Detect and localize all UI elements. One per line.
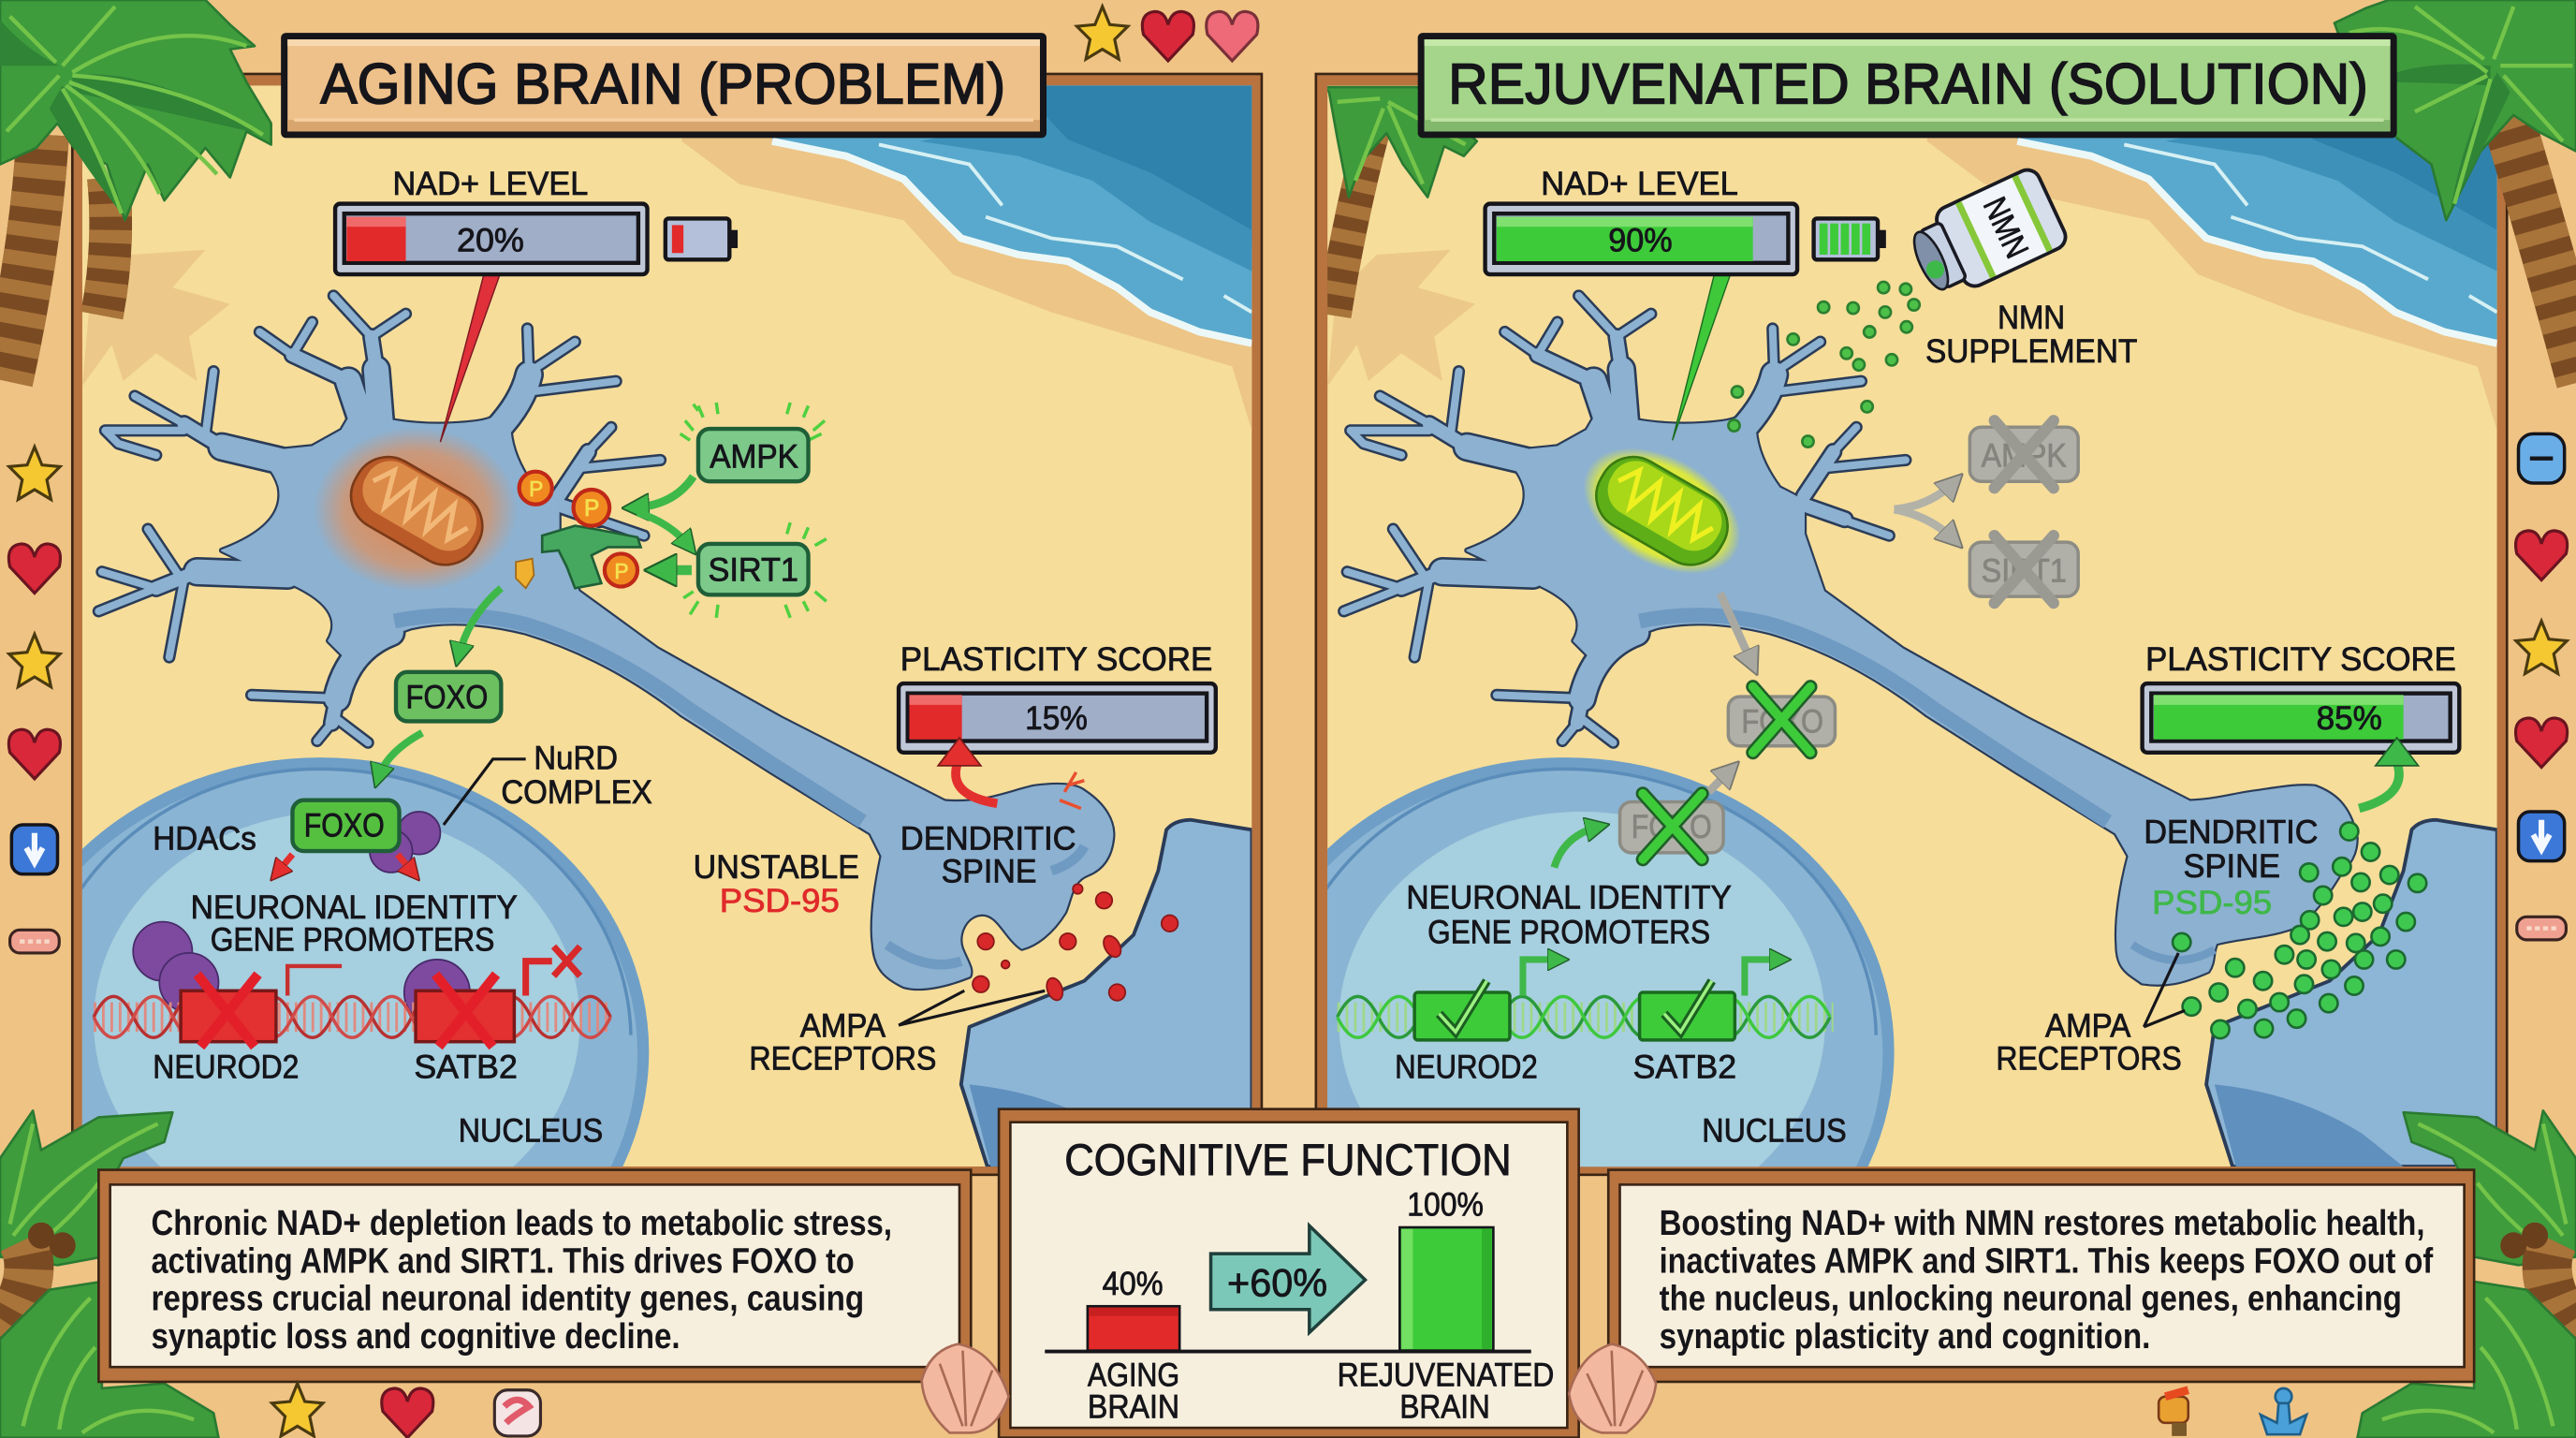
NMN supplement label — [1925, 300, 2137, 370]
arrow spine to plasticity — [938, 738, 997, 803]
AMPA receptors many — [2173, 822, 2426, 1038]
grey FOXO blocked nucleus: FOXO — [1632, 809, 1712, 845]
dendritic spine label right: SPINE — [2183, 848, 2280, 885]
HDAC purple blobs — [133, 922, 470, 1025]
text panel: solution summary: Boosting NAD+ with NMN restores metabolic health, — [1660, 1203, 2424, 1242]
arrow spine to plasticity right — [2359, 738, 2418, 808]
dendritic spine label: DENDRITIC — [900, 820, 1076, 857]
unstable PSD-95 label — [694, 849, 859, 919]
gene promoters label — [191, 889, 518, 958]
phosphate 1: P — [529, 477, 543, 501]
improvement arrow: +60% — [1227, 1261, 1327, 1305]
plasticity bar 85%: 85% — [2317, 700, 2382, 737]
dendritic spine label right: DENDRITIC — [2144, 814, 2318, 850]
arrow FOXO to nucleus — [378, 733, 422, 779]
SATB2 label: SATB2 — [414, 1049, 518, 1085]
shell left — [922, 1344, 1009, 1432]
icon: right heart 1 — [2516, 531, 2568, 580]
NAD+ bar 20%: 20% — [457, 223, 524, 259]
AMPA label right: RECEPTORS — [1996, 1041, 2182, 1078]
FOXO nucleus — [292, 800, 400, 851]
icon: left heart 2 — [8, 729, 60, 779]
AMPA label: AMPA — [800, 1007, 886, 1044]
grey FOXO blocked cytoplasm: FOXO — [1741, 704, 1823, 741]
plasticity bar 15% — [899, 683, 1216, 753]
AMPA leader lines right — [2144, 953, 2185, 1027]
HDACs label: HDACs — [153, 820, 256, 857]
icon: bottom pixel figure — [2159, 1390, 2188, 1436]
beach scene left — [0, 85, 1251, 1345]
arrow AMPK to phosphate — [633, 477, 694, 507]
aging axis label — [1088, 1357, 1179, 1426]
palm top right — [2334, 0, 2576, 381]
icon: right blue capsule — [2519, 433, 2565, 483]
title bar: rejuvenated brain: REJUVENATED BRAIN (SOLUTION) — [1448, 52, 2368, 117]
icon: right blue gem — [2519, 812, 2565, 861]
text panel: problem summary — [98, 1170, 971, 1382]
aging axis label: BRAIN — [1088, 1389, 1179, 1426]
text panel: solution summary: synaptic plasticity and cognition. — [1660, 1316, 2150, 1356]
panel: aging brain — [71, 73, 1264, 1176]
NAD+ pointer — [440, 271, 501, 442]
icon: right star — [2516, 621, 2567, 674]
battery full — [1814, 218, 1886, 259]
icon: bottom anchor — [2261, 1388, 2306, 1434]
plasticity bar 15%: 15% — [1025, 700, 1088, 737]
blocked promoter arrow 2 — [526, 946, 580, 996]
icon: left pill — [10, 930, 59, 953]
dendritic spine label — [900, 820, 1076, 889]
bar rejuvenated 100%: 100% — [1407, 1187, 1484, 1224]
icon: left blue gem — [11, 825, 57, 874]
NMN powder dots — [1728, 282, 1920, 448]
text panel: solution summary: the nucleus, unlocking neuronal genes, enhancing — [1660, 1279, 2402, 1318]
gene promoters label: GENE PROMOTERS — [211, 921, 494, 958]
promoter arrow 2 — [1745, 960, 1782, 996]
bar aging 40%: 40% — [1103, 1266, 1164, 1302]
AMPA label — [749, 1007, 936, 1078]
icon: bottom pink item — [494, 1390, 540, 1436]
NAD+ pointer right — [1673, 271, 1732, 440]
bar rejuvenated 100% — [1399, 1187, 1493, 1351]
palm bottom right — [2358, 1110, 2576, 1438]
mitochondrion green — [1561, 422, 1763, 600]
icon: left heart 1 — [8, 544, 60, 594]
mitochondrion orange — [314, 427, 518, 592]
icon: bottom heart — [382, 1388, 433, 1438]
gene box NEUROD2 active — [1414, 981, 1510, 1040]
AMPA leader lines — [899, 990, 1045, 1025]
unstable PSD-95 label: UNSTABLE — [694, 849, 859, 886]
AMPA label right: AMPA — [2045, 1007, 2131, 1044]
plasticity label right: PLASTICITY SCORE — [2145, 641, 2456, 678]
NUCLEUS label right: NUCLEUS — [1702, 1113, 1847, 1150]
neuron left — [98, 296, 1112, 988]
plasticity label: PLASTICITY SCORE — [900, 641, 1212, 678]
NAD+ bar 90% — [1486, 204, 1797, 274]
title bar: aging brain — [281, 33, 1046, 138]
palm top left — [0, 0, 271, 381]
panel frame left — [72, 74, 1262, 1175]
phosphate small yellow — [516, 559, 534, 588]
gene promoters label right: GENE PROMOTERS — [1427, 914, 1710, 950]
NuRD leader line — [444, 759, 526, 825]
gene promoters label right: NEURONAL IDENTITY — [1406, 880, 1732, 917]
phosphate 2 — [574, 490, 609, 526]
axis — [1045, 1350, 1531, 1353]
AMPA receptors scattered — [973, 884, 1178, 1003]
panel: cognitive function chart — [999, 1109, 1579, 1438]
icon: right heart 2 — [2516, 718, 2568, 768]
aging axis label: AGING — [1088, 1357, 1179, 1393]
NUCLEUS label: NUCLEUS — [459, 1113, 603, 1150]
text panel: problem summary: repress crucial neuronal identity genes, causing — [152, 1279, 864, 1318]
NEUROD2 label right: NEUROD2 — [1395, 1049, 1538, 1085]
NMN supplement label: SUPPLEMENT — [1925, 333, 2137, 370]
NEUROD2 label: NEUROD2 — [153, 1049, 299, 1085]
dendritic spine label right — [2144, 814, 2318, 885]
NuRD label: COMPLEX — [501, 774, 652, 811]
icon: bottom star — [272, 1384, 323, 1436]
FOXO cytoplasm — [396, 672, 501, 721]
rejuvenated axis label: BRAIN — [1399, 1389, 1490, 1426]
grey SIRT1 inactive — [1969, 536, 2078, 603]
NAD+ label right: NAD+ LEVEL — [1541, 166, 1738, 202]
improvement arrow — [1211, 1225, 1365, 1332]
phosphate 3: P — [614, 559, 629, 583]
receptor target protein — [542, 526, 641, 588]
NAD+ bar 20% — [335, 204, 648, 274]
AMPK active: AMPK — [710, 438, 799, 475]
SIRT1 active — [683, 522, 827, 618]
gene box SATB2 active — [1640, 981, 1734, 1040]
text panel: problem summary: synaptic loss and cognitive decline. — [152, 1316, 681, 1356]
battery low — [666, 218, 738, 259]
palm small inside right panel — [1325, 87, 1477, 315]
NAD+ bar 90%: 90% — [1608, 223, 1673, 259]
icon: right pill — [2517, 917, 2566, 940]
arrow to SIRT1 — [637, 513, 690, 547]
DNA strand green — [1338, 996, 1834, 1037]
blocked promoter arrow 1 — [287, 966, 342, 996]
SIRT1 active: SIRT1 — [708, 551, 798, 588]
rejuvenated axis label: REJUVENATED — [1338, 1357, 1554, 1393]
shell right — [1569, 1344, 1656, 1432]
grey FOXO blocked nucleus — [1620, 794, 1723, 859]
panel frame right — [1316, 74, 2507, 1175]
neuron right — [1344, 296, 2356, 984]
FOXO cytoplasm: FOXO — [406, 679, 488, 715]
gene box SATB2 repressed — [416, 975, 514, 1047]
title bar: rejuvenated brain — [1418, 33, 2397, 138]
plasticity bar 85% — [2143, 683, 2459, 753]
grey AMPK inactive: AMPK — [1982, 437, 2067, 474]
NAD+ label: NAD+ LEVEL — [393, 166, 588, 202]
AMPA label: RECEPTORS — [749, 1041, 936, 1078]
grey FOXO blocked cytoplasm — [1728, 687, 1835, 753]
grey AMPK inactive — [1969, 420, 2078, 488]
FOXO nucleus: FOXO — [304, 807, 385, 844]
promoter arrow 1 — [1523, 960, 1560, 996]
DNA strand red — [94, 996, 611, 1037]
bar aging 40% — [1088, 1266, 1179, 1351]
grey arrow out of nucleus — [1708, 769, 1732, 792]
icon: top star — [1076, 7, 1128, 59]
palm bottom left — [0, 1110, 218, 1438]
NuRD label: NuRD — [534, 740, 618, 776]
grey branching arrows — [1895, 481, 1955, 540]
dendritic spine label: SPINE — [942, 853, 1036, 889]
title bar: aging brain: AGING BRAIN (PROBLEM) — [320, 52, 1005, 117]
phosphate 2: P — [584, 496, 599, 521]
SATB2 label right: SATB2 — [1633, 1049, 1736, 1085]
icon: top pink heart — [1207, 11, 1258, 61]
text panel: problem summary: Chronic NAD+ depletion leads to metabolic stress, — [152, 1203, 892, 1242]
grey SIRT1 inactive: SIRT1 — [1982, 552, 2067, 589]
beach scene right — [1237, 85, 2497, 1345]
AMPA label right — [1996, 1007, 2182, 1078]
gene box NEUROD2 repressed — [181, 975, 276, 1047]
text panel: problem summary: activating AMPK and SIRT1. This drives FOXO to — [152, 1240, 855, 1280]
red arrows repress — [276, 855, 414, 874]
NMN bottle — [1903, 166, 2070, 304]
green exit arrow — [1554, 827, 1600, 868]
icon: left star 2 — [9, 634, 60, 687]
NMN bottle: NMN — [1976, 192, 2035, 264]
gene promoters label: NEURONAL IDENTITY — [191, 889, 518, 926]
grey arrow to FOXO — [1720, 594, 1753, 666]
PSD-95 label right: PSD-95 — [2152, 885, 2272, 921]
rejuvenated axis label — [1338, 1357, 1554, 1426]
icon: top heart — [1142, 11, 1193, 61]
text panel: solution summary: inactivates AMPK and SIRT1. This keeps FOXO out of — [1660, 1240, 2434, 1280]
NuRD label — [501, 740, 652, 811]
phosphate 1 — [520, 472, 552, 505]
text panel: solution summary — [1608, 1170, 2474, 1382]
arrow to FOXO — [459, 588, 501, 657]
icon: left star 1 — [9, 447, 60, 500]
arrow SIRT1 to phosphate — [657, 567, 692, 573]
unstable PSD-95 label: PSD-95 — [720, 883, 840, 919]
NuRD complex blob — [370, 812, 440, 873]
gene promoters label right — [1406, 880, 1732, 950]
AMPK active — [681, 403, 825, 481]
chart title: COGNITIVE FUNCTION — [1064, 1136, 1512, 1185]
NMN supplement label: NMN — [1998, 300, 2065, 336]
phosphate 3 — [605, 553, 637, 587]
panel: rejuvenated brain — [1237, 74, 2507, 1345]
